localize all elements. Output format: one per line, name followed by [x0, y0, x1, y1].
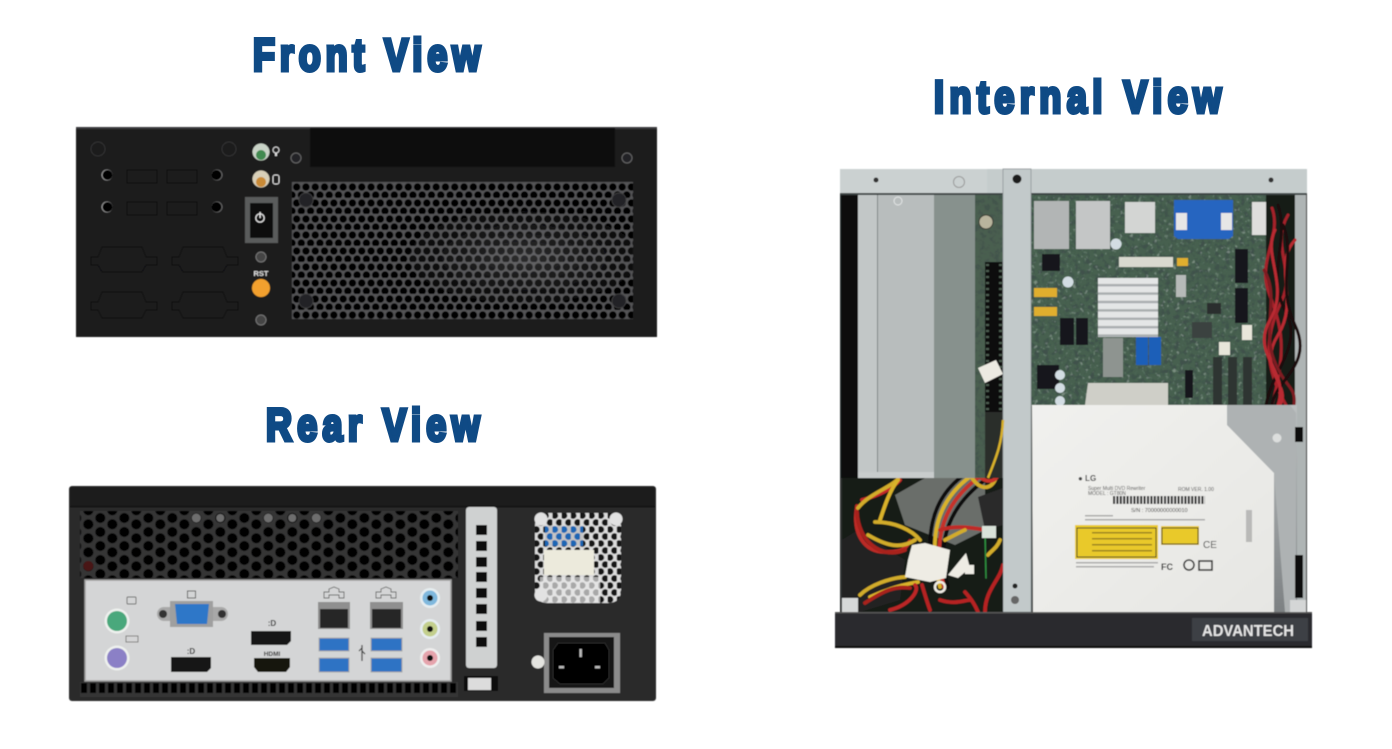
DisplayPort ports: :D — [187, 647, 195, 656]
warning label right — [1161, 526, 1199, 545]
USB 3.0 ports — [319, 638, 402, 672]
model number: MODEL : GT80N — [1088, 491, 1126, 497]
CPU socket — [1085, 383, 1168, 405]
memory slots — [1213, 357, 1252, 405]
panel: internal view chassis — [835, 169, 1312, 648]
power inlet socket — [532, 633, 620, 693]
power supply fan grille — [534, 512, 622, 603]
expansion riser slot — [975, 195, 1003, 480]
bottom vent slots — [80, 682, 458, 697]
red and black twisted wires — [1264, 205, 1300, 405]
power cable bundle — [842, 468, 1003, 612]
PS/2 keyboard and mouse ports — [104, 597, 138, 670]
drive label — [1075, 474, 1252, 572]
logo: Advantech: ADVANTECH — [1202, 623, 1294, 640]
fine print — [1076, 515, 1205, 568]
recycling marks — [1184, 560, 1212, 570]
center support pillar — [1003, 169, 1031, 612]
icon: USB — [359, 645, 365, 661]
title: Front View: Front View — [253, 30, 480, 80]
power rocker switch — [245, 197, 278, 243]
DisplayPort ports: :D — [268, 619, 276, 628]
revision: ROM VER. 1.00 — [1178, 487, 1214, 493]
optical drive — [1032, 405, 1274, 612]
VGA port — [157, 591, 228, 627]
power supply bay — [858, 195, 975, 478]
icon: HDD LED — [252, 170, 279, 188]
title: Rear View: Rear View — [266, 400, 480, 450]
model text: Super Multi DVD Rewriter — [1088, 486, 1146, 492]
logo plate — [1192, 618, 1308, 641]
reset button — [252, 279, 270, 297]
audio jacks — [420, 588, 440, 668]
mounting holes — [102, 170, 222, 212]
CPU heatsink — [1098, 278, 1158, 337]
ventilation grille — [292, 182, 633, 319]
icon: power LED — [252, 144, 279, 160]
top lip — [70, 487, 655, 507]
certification marks: FC — [1161, 562, 1173, 572]
panel: front view chassis — [76, 127, 657, 337]
reset label: RST — [254, 269, 269, 278]
right side wall — [1266, 195, 1306, 612]
panel: rear view chassis — [69, 486, 656, 701]
LAN ports — [318, 587, 403, 629]
rear I/O connectors — [1034, 201, 1275, 249]
I/O panel — [85, 580, 451, 681]
expansion slot bracket — [464, 507, 498, 691]
board components — [1037, 249, 1248, 398]
blank connector knockouts — [91, 142, 238, 318]
silver chips and headers — [1103, 257, 1252, 377]
SATA ports — [1136, 337, 1161, 365]
barcode — [1113, 496, 1205, 504]
optical drive bracket — [1227, 405, 1306, 612]
motherboard — [1031, 194, 1275, 406]
HDMI port: HDMI — [264, 651, 280, 658]
serial: S/N : 70000000000010 — [1131, 508, 1188, 514]
warning label left — [1075, 525, 1158, 559]
front bar — [835, 612, 1312, 648]
capacitors — [1055, 238, 1122, 406]
yellow inductors — [1034, 258, 1188, 316]
brand: ● LG — [1078, 474, 1096, 483]
DisplayPort ports — [171, 619, 291, 672]
top rail — [840, 169, 1307, 195]
title: Internal View: Internal View — [934, 72, 1221, 122]
side sticker — [1246, 510, 1252, 542]
VGA connector — [1174, 200, 1233, 239]
grille and panel screws — [256, 153, 632, 325]
rear ventilation grille — [80, 511, 458, 578]
CE mark: CE — [1203, 540, 1217, 551]
top drive bay cover — [310, 128, 615, 167]
yellow power wires in front of pillar — [988, 420, 1003, 478]
HDMI port — [254, 651, 290, 672]
